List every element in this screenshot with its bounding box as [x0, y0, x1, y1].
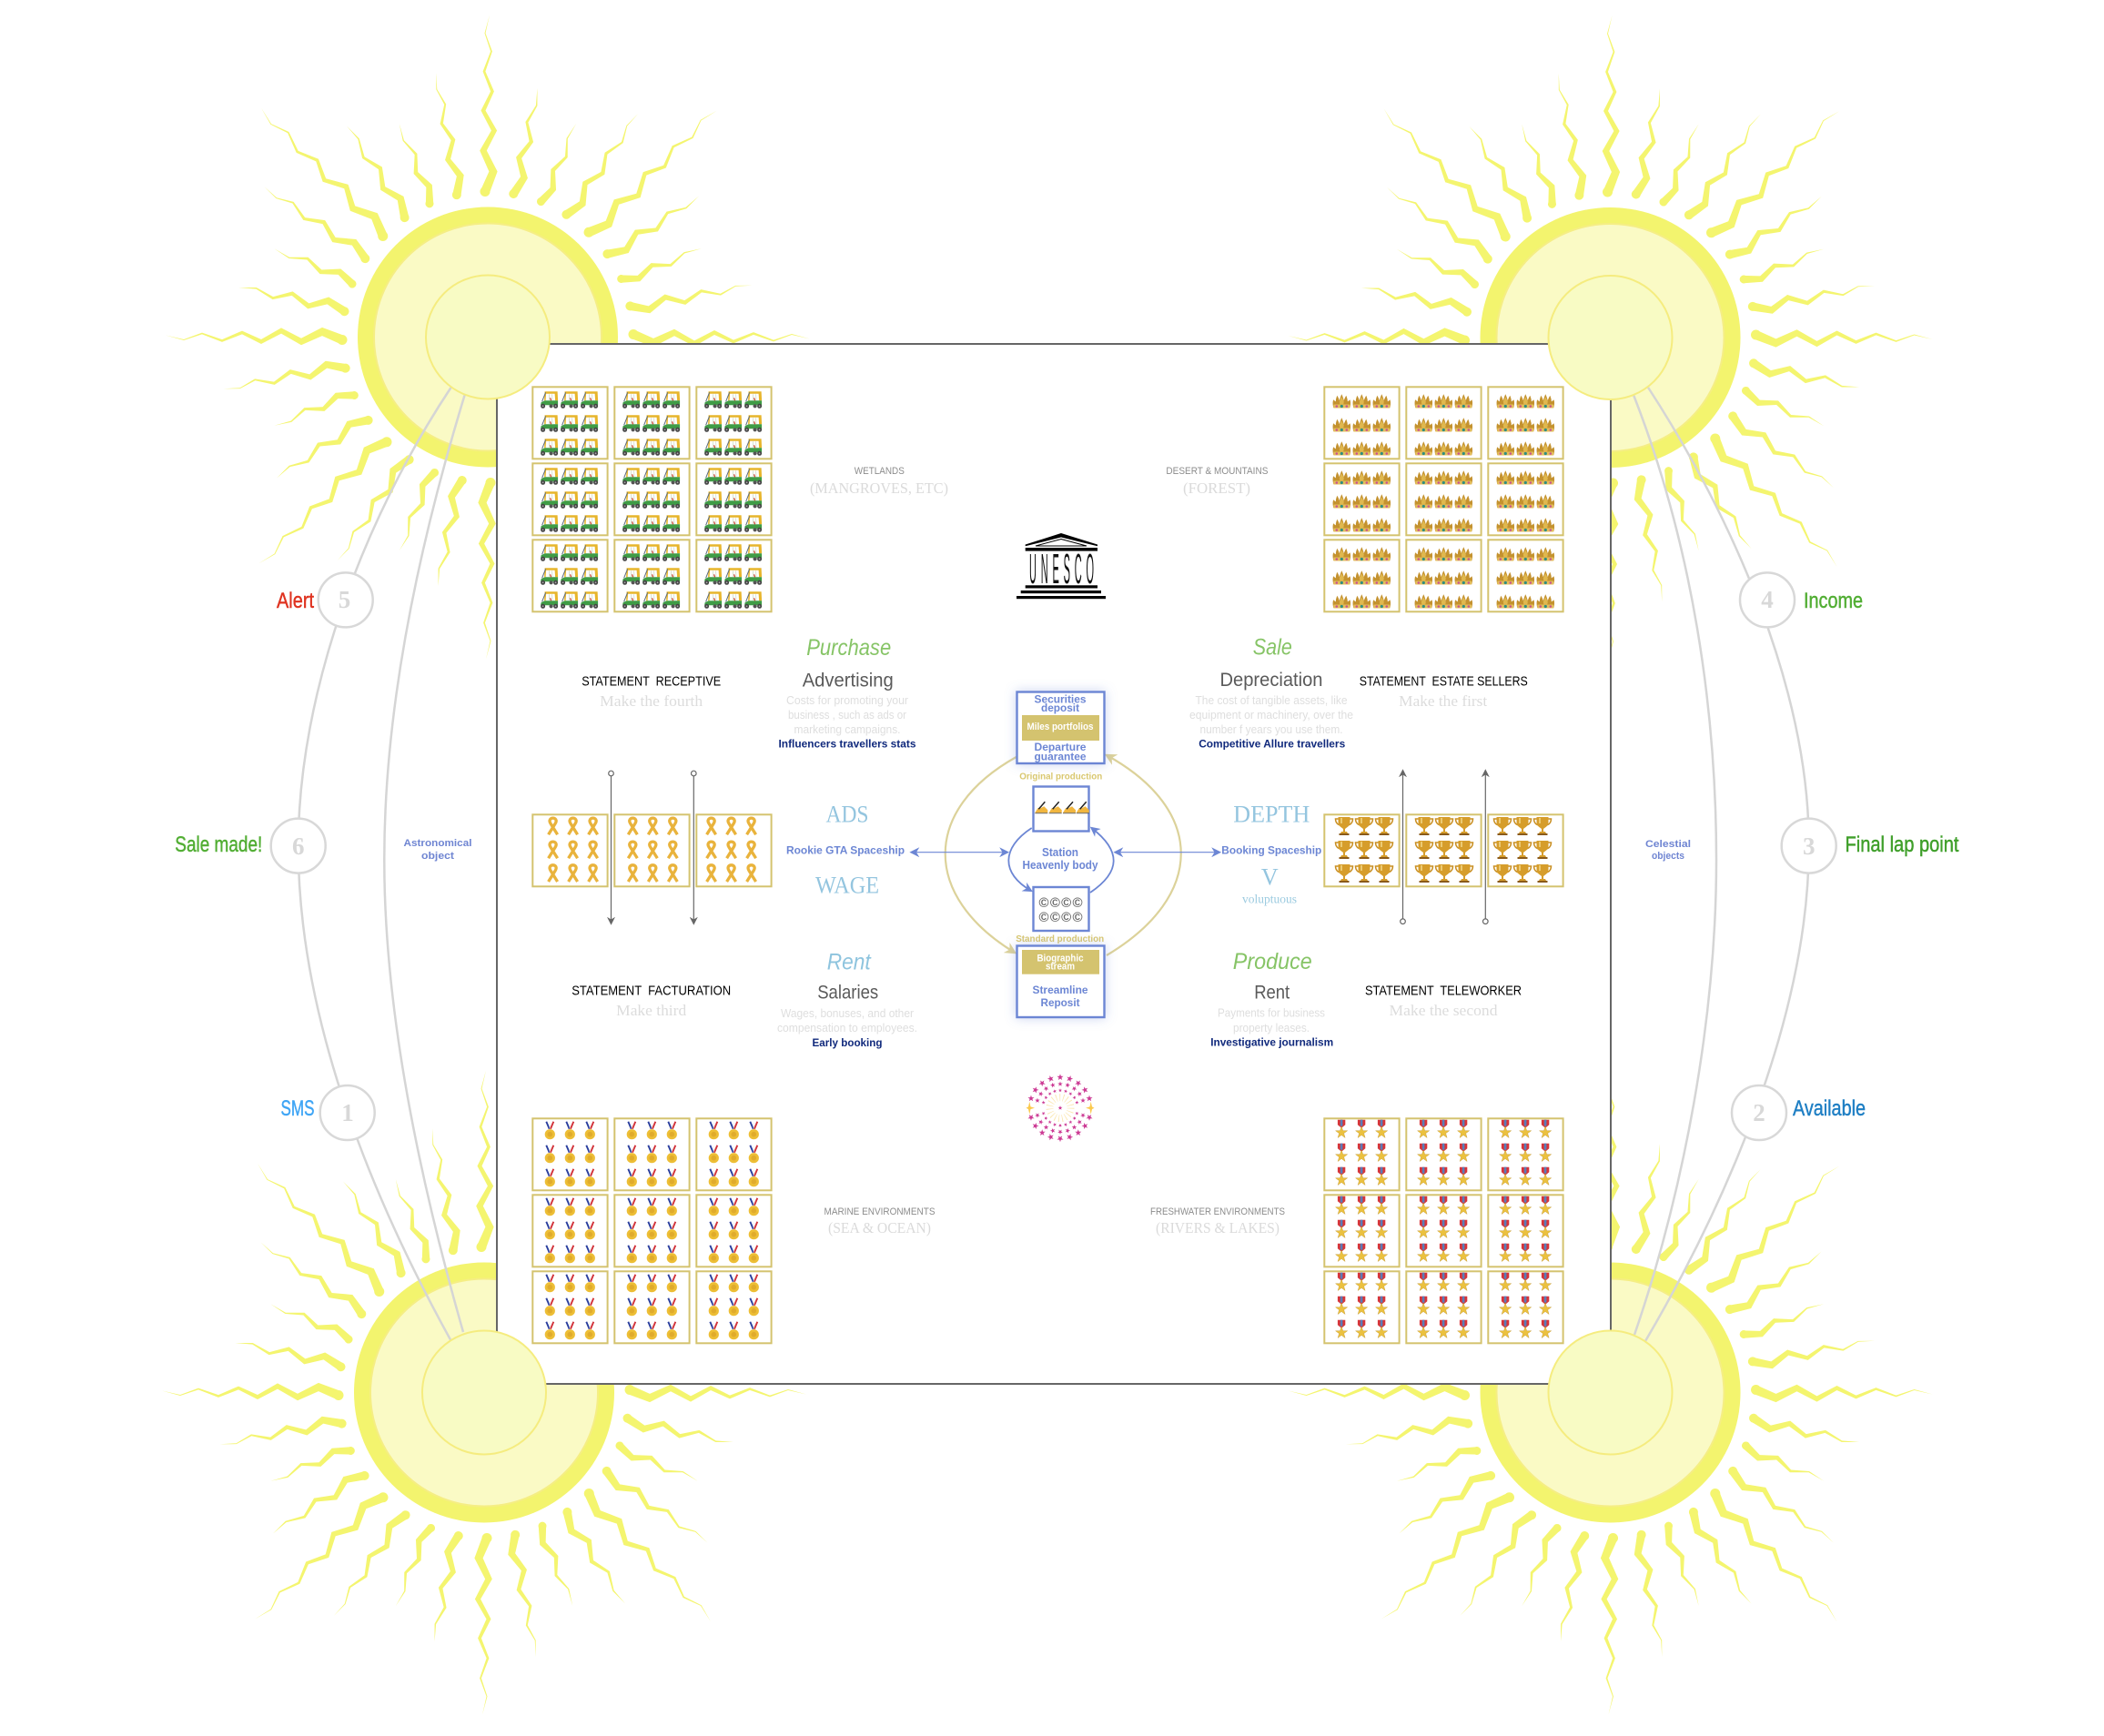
label: celestial objects: Celestial	[1645, 839, 1691, 850]
box: copyright symbols: ©©©©	[1039, 895, 1083, 911]
label: ads and wage: ADS	[826, 801, 868, 827]
step node 6: Sale made: Sale made!	[175, 833, 262, 857]
text: wetlands: WETLANDS	[855, 466, 905, 477]
arc: left outer orbit	[298, 388, 451, 1339]
box: biographic stream: Streamline	[1032, 984, 1088, 996]
block: sale depreciation: The cost of tangible assets, like	[1196, 694, 1348, 707]
label: original production: Original production	[1019, 772, 1102, 782]
block: produce rent: Rent	[1254, 983, 1290, 1004]
text: freshwater environments	[1150, 1206, 1285, 1236]
label: depth and v: DEPTH	[1233, 801, 1310, 827]
block: produce rent: property leases.	[1233, 1022, 1310, 1035]
box: securities deposit: deposit	[1041, 701, 1079, 714]
sun: top right	[1272, 0, 1948, 676]
label: standard production: Standard production	[1016, 934, 1104, 944]
flow arcs: blue inner loop	[1008, 828, 1114, 893]
statement: teleworker	[1365, 983, 1522, 1019]
text: freshwater environments: (RIVERS & LAKES)	[1156, 1219, 1280, 1236]
block: purchase advertising: Influencers travellers stats	[779, 738, 916, 751]
box: securities deposit: Miles portfolios	[1027, 722, 1094, 732]
statement: receptive: STATEMENT RECEPTIVE	[582, 673, 721, 689]
label: astronomical object: Astronomical	[404, 838, 471, 849]
block: sale depreciation	[1189, 634, 1353, 751]
label: depth and v: Booking Spaceship	[1221, 844, 1321, 857]
step node 2: Available: 2	[1753, 1099, 1765, 1126]
statement: facturation	[572, 983, 731, 1019]
central framed panel	[497, 344, 1611, 1384]
arc: left inner orbit	[384, 394, 465, 1332]
logo: UNESCO temple	[1017, 533, 1106, 599]
block: purchase advertising: Advertising	[803, 670, 894, 691]
icon grid: sports medals	[532, 1118, 772, 1343]
block: purchase advertising: marketing campaigns.	[794, 723, 901, 736]
step node 5: Alert: Alert	[277, 589, 314, 613]
step node 1: SMS: SMS	[280, 1096, 315, 1121]
box: copyright symbols: ©©©©	[1039, 910, 1083, 925]
sun: bottom right	[1272, 1055, 1948, 1731]
sun core: top right	[1549, 276, 1673, 399]
statement: estate sellers: STATEMENT ESTATE SELLERS	[1360, 673, 1528, 689]
block: produce rent: Payments for business	[1218, 1007, 1325, 1020]
step node 1: SMS: 1	[341, 1099, 354, 1126]
statement: facturation: STATEMENT FACTURATION	[572, 983, 731, 998]
sun: bottom left	[146, 1055, 823, 1731]
block: rent salaries	[777, 950, 917, 1049]
box: securities deposit: guarantee	[1034, 750, 1087, 762]
sun core: top left	[426, 275, 550, 399]
box: copyright symbols	[1034, 887, 1088, 931]
sun: top left	[149, 0, 826, 675]
block: sale depreciation: Depreciation	[1219, 670, 1323, 691]
block: produce rent: Investigative journalism	[1210, 1036, 1333, 1049]
text: marine environments: MARINE ENVIRONMENTS	[824, 1206, 936, 1217]
block: purchase advertising: Purchase	[806, 635, 891, 661]
flow arcs: gold outer loop	[946, 755, 1181, 955]
arc: right outer orbit	[1645, 387, 1809, 1341]
step node 1: SMS	[280, 1085, 375, 1140]
block: purchase advertising: Costs for promoting your	[786, 694, 908, 707]
step node 2: Available: Available	[1793, 1096, 1866, 1121]
label: depth and v: voluptuous	[1242, 893, 1297, 907]
statement: receptive: Make the fourth	[600, 692, 703, 710]
box: biographic stream: Biographic	[1037, 954, 1083, 964]
statement: facturation: Make third	[616, 1002, 687, 1019]
box: biographic stream	[1017, 946, 1105, 1017]
label: station heavenly body: Heavenly body	[1023, 858, 1098, 872]
label: station heavenly body	[1023, 845, 1098, 872]
text: desert and mountains: DESERT & MOUNTAINS	[1166, 466, 1268, 477]
statement: estate sellers	[1360, 673, 1528, 710]
block: produce rent	[1210, 949, 1333, 1049]
label: station heavenly body: Station	[1042, 845, 1078, 859]
logo: pink star burst	[1027, 1074, 1094, 1142]
block: rent salaries: Rent	[827, 950, 872, 975]
box: securities deposit: Departure	[1034, 741, 1087, 753]
step node 4: Income	[1740, 572, 1863, 627]
icon grid: crowns	[1324, 387, 1563, 611]
label: celestial objects: objects	[1652, 851, 1684, 862]
arc: right inner orbit	[1634, 395, 1716, 1335]
step node 3: Final lap point	[1782, 819, 1959, 873]
box: securities deposit: Securities	[1034, 692, 1087, 705]
logo: UNESCO temple: UNESCO	[1029, 547, 1094, 593]
step node 3: Final lap point: Final lap point	[1846, 833, 1959, 857]
label: depth and v: V	[1261, 864, 1279, 891]
step node 3: Final lap point: 3	[1803, 833, 1815, 860]
label: celestial objects	[1645, 839, 1691, 862]
block: purchase advertising: business , such as ads or	[788, 709, 906, 722]
step node 6: Sale made: 6	[292, 833, 304, 860]
text: wetlands	[810, 466, 948, 497]
icon grid: military medals	[1324, 1118, 1563, 1343]
text: marine environments: (SEA & OCEAN)	[828, 1219, 931, 1236]
block: purchase advertising	[779, 635, 916, 751]
statement: estate sellers: Make the first	[1399, 692, 1487, 710]
text: desert and mountains	[1166, 466, 1268, 497]
step node 6: Sale made	[175, 819, 326, 873]
arrows: left vertical down	[609, 771, 696, 924]
box: biographic stream: Reposit	[1041, 996, 1079, 1009]
block: rent salaries: Salaries	[817, 983, 878, 1004]
statement: teleworker: STATEMENT TELEWORKER	[1365, 983, 1522, 998]
block: rent salaries: Early booking	[812, 1036, 883, 1049]
arrow: right horizontal link	[1116, 852, 1219, 853]
step node 5: Alert: 5	[339, 586, 350, 613]
step node 2: Available	[1732, 1085, 1866, 1140]
sun core: bottom right	[1549, 1330, 1673, 1454]
label: astronomical object: object	[421, 851, 454, 862]
step node 5: Alert	[277, 572, 373, 627]
block: produce rent: Produce	[1233, 949, 1312, 974]
label: ads and wage: WAGE	[815, 873, 879, 899]
icon row: trophies	[1324, 814, 1563, 886]
step node 4: Income: 4	[1761, 586, 1774, 613]
step node 4: Income: Income	[1804, 589, 1863, 613]
box: biographic stream: stream	[1046, 962, 1075, 973]
block: sale depreciation: Sale	[1253, 634, 1292, 660]
block: rent salaries: compensation to employees.	[777, 1022, 917, 1035]
statement: receptive	[582, 673, 721, 710]
label: ads and wage	[786, 801, 905, 899]
arrow: left horizontal link	[912, 852, 1007, 853]
box: securities deposit	[1017, 691, 1105, 763]
label: astronomical object	[404, 838, 471, 862]
block: rent salaries: Wages, bonuses, and other	[781, 1007, 914, 1020]
block: sale depreciation: equipment or machinery, over the	[1189, 709, 1353, 722]
text: marine environments	[824, 1206, 936, 1236]
label: depth and v	[1221, 801, 1321, 907]
icon grid: tuk-tuks	[532, 387, 772, 611]
text: freshwater environments: FRESHWATER ENVIRONMENTS	[1150, 1206, 1285, 1217]
sun core: bottom left	[422, 1330, 546, 1454]
icon row: ribbons	[532, 814, 772, 886]
text: desert and mountains: (FOREST)	[1183, 479, 1250, 497]
statement: teleworker: Make the second	[1389, 1002, 1498, 1019]
box: writing hands	[1034, 786, 1089, 832]
arrows: right vertical up	[1401, 771, 1488, 924]
text: wetlands: (MANGROVES, ETC)	[810, 479, 948, 497]
label: ads and wage: Rookie GTA Spaceship	[786, 844, 905, 857]
block: sale depreciation: number f years you use them.	[1199, 723, 1343, 736]
block: sale depreciation: Competitive Allure travellers	[1199, 738, 1346, 751]
